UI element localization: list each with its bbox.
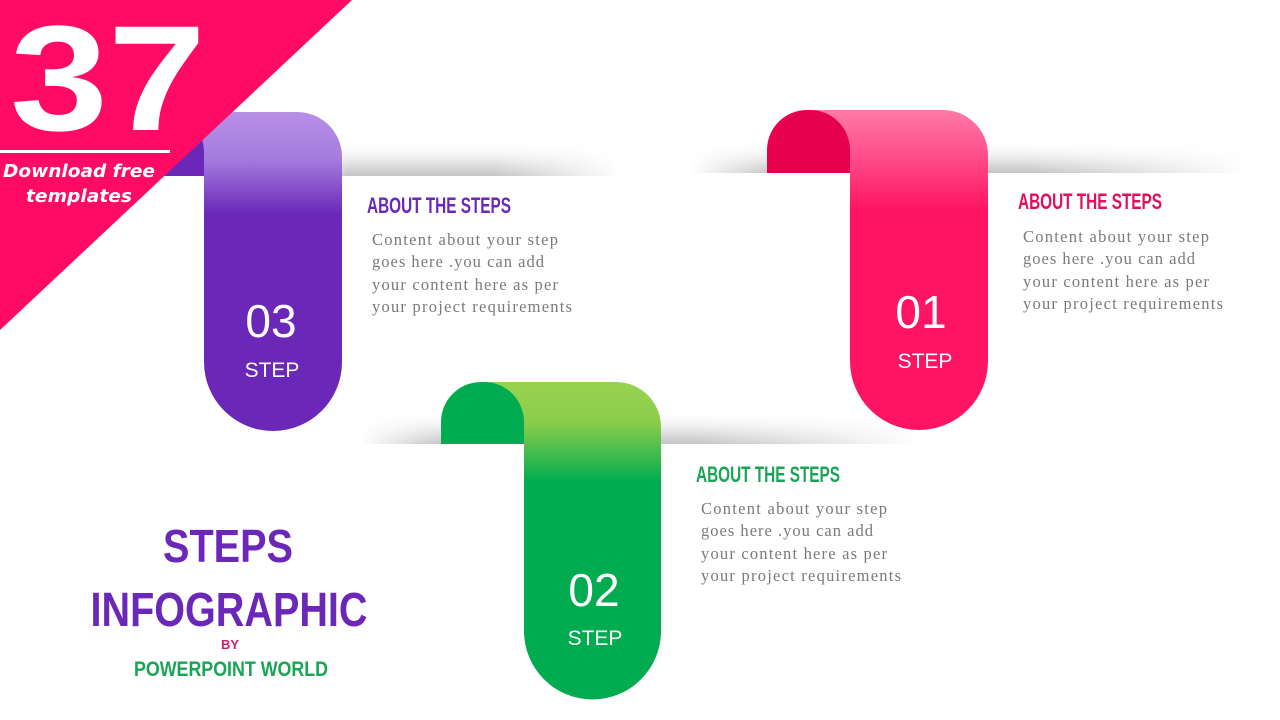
corner banner (0, 0, 352, 330)
title block: STEPS (163, 520, 293, 572)
heading: ABOUT THE STEPS (696, 462, 840, 487)
title block (90, 520, 368, 681)
shadow band: step 01 (702, 151, 1218, 173)
text block: step 02: your project requirements (701, 566, 901, 585)
heading: ABOUT THE STEPS (367, 193, 511, 218)
shadow band: step 03 (342, 152, 601, 176)
title block: POWERPOINT WORLD (134, 658, 328, 681)
label STEP: STEP (568, 627, 622, 650)
label STEP: STEP (898, 350, 952, 373)
title block: BY (221, 637, 239, 652)
text block: step 02: Content about your step (701, 499, 887, 518)
text block: step 02: your content here as per (701, 544, 888, 563)
number 01: 01 (895, 286, 947, 338)
number 02: 02 (568, 564, 620, 616)
shadow band: step 02 (372, 422, 888, 444)
text block: step 01 (1018, 189, 1223, 313)
text block: step 03: Content about your step (372, 230, 558, 249)
banner caption: Download free (3, 161, 155, 182)
ribbon: step 01 (767, 110, 988, 430)
heading: ABOUT THE STEPS (1018, 189, 1162, 214)
text block: step 01: your content here as per (1023, 272, 1210, 291)
title block: INFOGRAPHIC (90, 584, 368, 637)
text block: step 03: your project requirements (372, 297, 572, 316)
ribbon: step 02 (441, 382, 661, 700)
banner caption: templates (26, 186, 132, 207)
text block: step 03 (367, 193, 572, 316)
text block: step 03: your content here as per (372, 275, 558, 294)
number 03: 03 (245, 295, 297, 347)
text block: step 01: goes here .you can add (1023, 249, 1196, 268)
ribbon: step 03 (160, 112, 342, 431)
text block: step 02 (696, 462, 901, 585)
label STEP: STEP (245, 359, 299, 382)
text block: step 02: goes here .you can add (701, 521, 874, 540)
text block: step 01: Content about your step (1023, 227, 1209, 246)
text block: step 03: goes here .you can add (372, 252, 545, 271)
text block: step 01: your project requirements (1023, 294, 1223, 313)
